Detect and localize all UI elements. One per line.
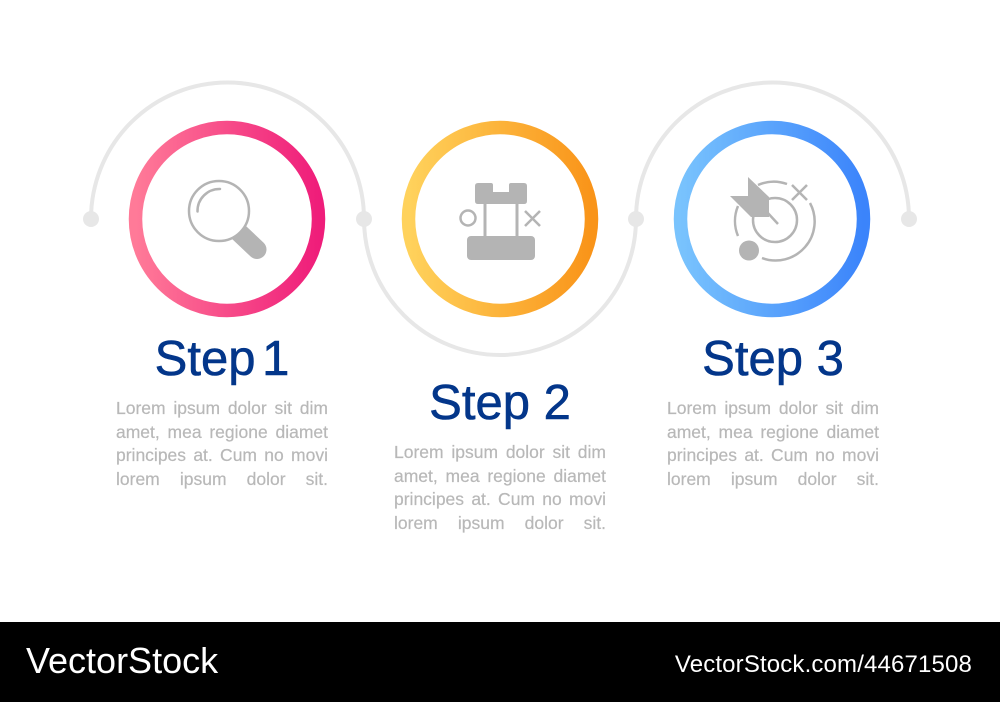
text: step 1: Lorem ipsum dolor sit dim [116, 398, 328, 418]
heading: step 2: Step 2 [429, 376, 571, 430]
text: step 3 [667, 398, 879, 489]
ring: step 2 [408, 128, 592, 310]
icon: chess rook with tic-tac-toe marks [460, 183, 540, 260]
connector dots [83, 211, 917, 227]
text: step 3: amet, mea regione diamet [667, 422, 879, 442]
text: step 3: lorem ipsum dolor sit. [667, 468, 879, 488]
text: step 2: principes at. Cum no movi [394, 489, 606, 509]
text: step 1 [116, 398, 328, 489]
text: step 3: Lorem ipsum dolor sit dim [667, 398, 879, 418]
heading: step 3: Step 3 [702, 332, 844, 386]
footer logo: VectorStock [26, 640, 218, 681]
text: step 1: amet, mea regione diamet [116, 422, 328, 442]
connector arcs [91, 82, 909, 355]
ring: step 1 [136, 128, 318, 310]
heading: step 1: Step 1 [155, 332, 289, 386]
text: step 1: principes at. Cum no movi [116, 445, 328, 465]
text: step 2: lorem ipsum dolor sit. [394, 512, 606, 532]
icon: magnifying glass [189, 181, 257, 250]
text: step 1: lorem ipsum dolor sit. [116, 468, 328, 488]
ring: step 3 [680, 128, 864, 310]
text: step 2: amet, mea regione diamet [394, 466, 606, 486]
text: step 3: principes at. Cum no movi [667, 445, 879, 465]
footer id: VectorStock.com/44671508 [675, 651, 972, 678]
text: step 2: Lorem ipsum dolor sit dim [394, 442, 606, 462]
icon: target with dart [730, 177, 815, 260]
text: step 2 [394, 442, 606, 533]
footer bar [0, 622, 1000, 702]
